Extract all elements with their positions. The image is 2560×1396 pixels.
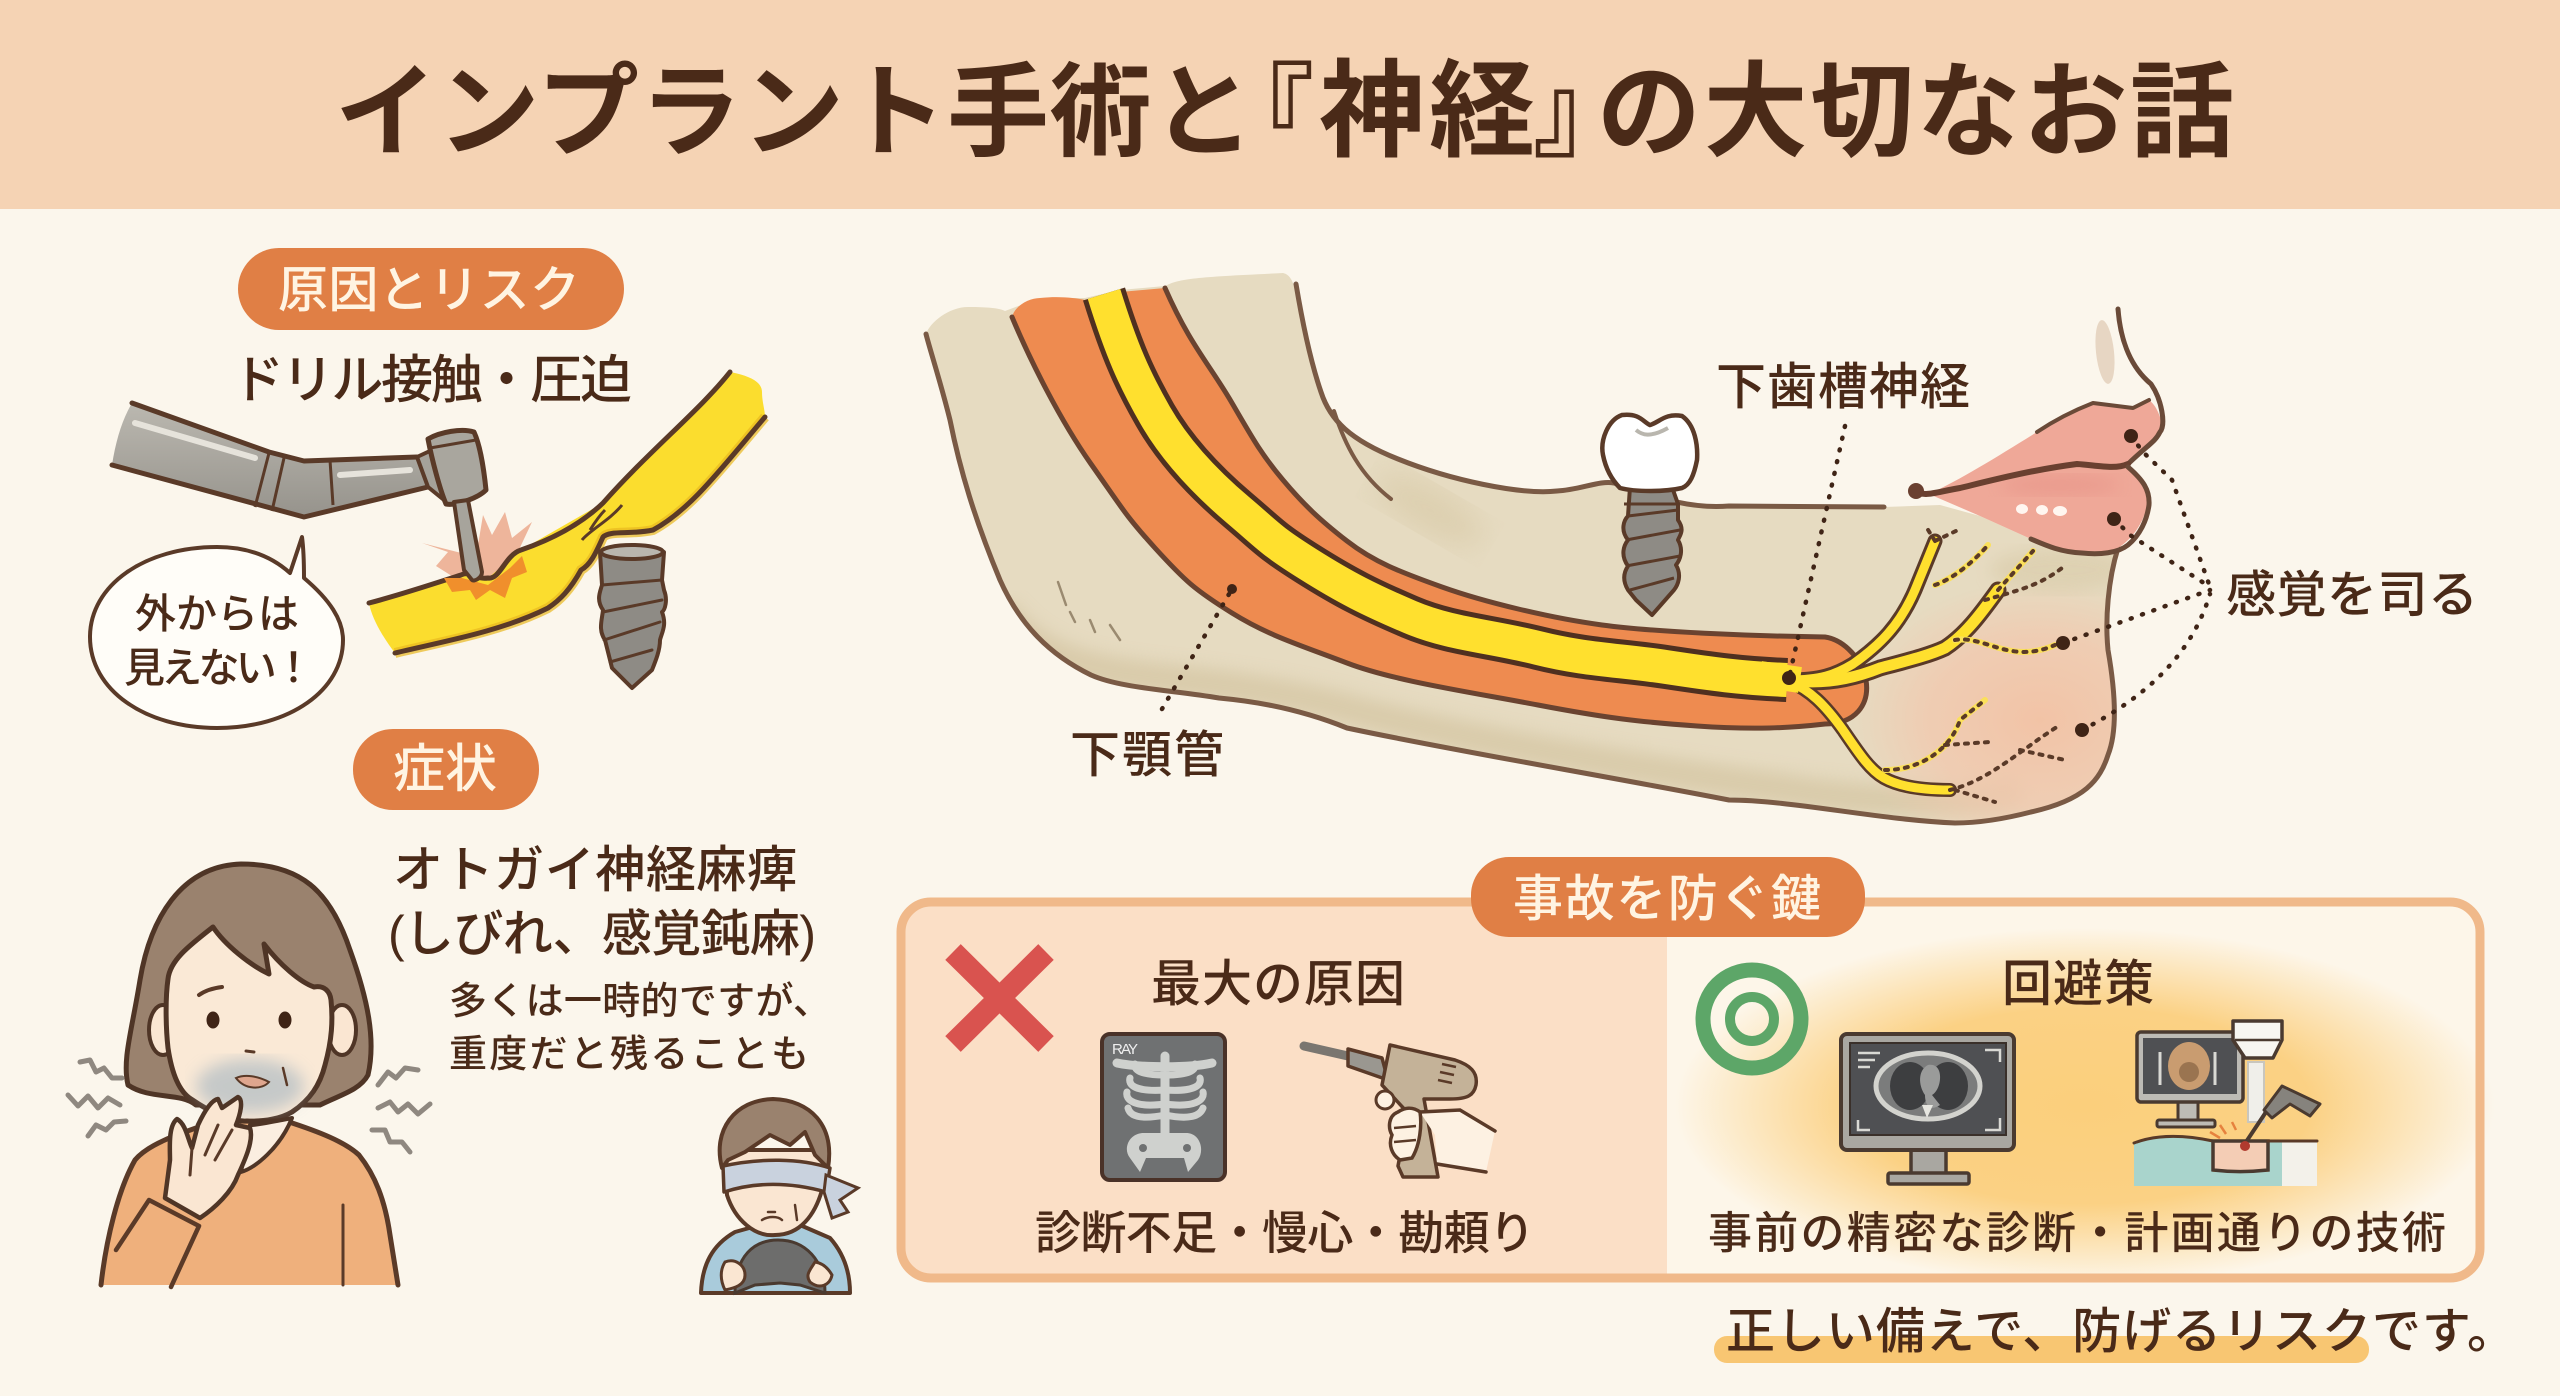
pill heading: keys: 事故を防ぐ鍵	[1513, 871, 1821, 927]
icon: red cross	[953, 952, 1046, 1044]
text: prevention: 事前の精密な診断・計画通りの技術	[1708, 1209, 2446, 1258]
symptom note	[449, 981, 831, 1076]
callout: speech bubble: 外からは	[135, 591, 299, 637]
icon: CT monitor	[1841, 1034, 2014, 1184]
pill heading: keys	[1471, 857, 1865, 937]
text: causes: 診断不足・慢心・勘頼り	[1035, 1207, 1535, 1259]
alveolar nerve	[1104, 294, 1787, 680]
icon: implant screw left	[599, 545, 666, 688]
title: の大切なお話	[1597, 55, 2234, 171]
pill heading: causes and risk	[238, 248, 624, 330]
symptom heading: オトガイ神経麻痺	[393, 842, 797, 898]
heading: drill contact: ドリル接触・圧迫	[232, 352, 632, 410]
title: 』	[1533, 56, 1635, 170]
icon: green double circle	[1703, 970, 1801, 1068]
title: 『	[1212, 56, 1314, 170]
mandibular canal	[1012, 288, 1867, 728]
title: インプラント手術と	[335, 56, 1254, 170]
icon: dental handpiece	[112, 403, 486, 517]
callout: speech bubble	[90, 537, 343, 728]
icon: numbness wavy lines	[68, 1060, 430, 1152]
header band	[0, 0, 2560, 209]
callout: speech bubble: 見えない！	[124, 645, 314, 691]
heading: countermeasure: 回避策	[2002, 956, 2154, 1012]
closing message with highlight: 正しい備えで、防げるリスクです。	[1726, 1305, 2516, 1359]
title: 神経	[1319, 53, 1535, 171]
icon: drill bur	[454, 500, 482, 581]
diagram: jaw and inferior alveolar nerve	[924, 273, 2120, 826]
symptom note: 重度だと残ることも	[449, 1034, 809, 1076]
symptom note: 多くは一時的ですが、	[449, 981, 831, 1023]
dotted leader lines	[1162, 426, 2210, 737]
illustration: nerve compression	[369, 372, 765, 653]
panel: keys to preventing accidents	[901, 857, 2495, 1284]
pill heading: symptoms: 症状	[393, 741, 497, 799]
icon: guided surgery	[2134, 1021, 2320, 1186]
title	[335, 53, 2234, 171]
pill heading: causes and risk: 原因とリスク	[278, 262, 580, 318]
dotted nerve branches	[1885, 525, 2065, 802]
jaw bone	[926, 273, 2118, 823]
symptom heading	[388, 842, 816, 962]
icon: x-ray film	[1102, 1034, 1225, 1180]
icon: hand drill	[1304, 1045, 1495, 1177]
illustration: blindfolded driver	[701, 1099, 858, 1293]
icon: lips and nose profile	[1908, 309, 2163, 554]
symptom heading: (しびれ、感覚鈍麻)	[388, 906, 816, 962]
icon: x-ray film: RAY	[1112, 1041, 1138, 1058]
pill heading: symptoms	[353, 729, 539, 810]
heading: biggest cause: 最大の原因	[1151, 956, 1405, 1012]
illustration: woman with numb chin	[101, 864, 398, 1287]
label: inferior alveolar nerve: 下歯槽神経	[1716, 359, 1970, 415]
icon: implant with crown	[1602, 415, 1697, 615]
label: mandibular canal: 下顎管	[1070, 727, 1224, 783]
label: controls sensation: 感覚を司る	[2226, 567, 2478, 623]
